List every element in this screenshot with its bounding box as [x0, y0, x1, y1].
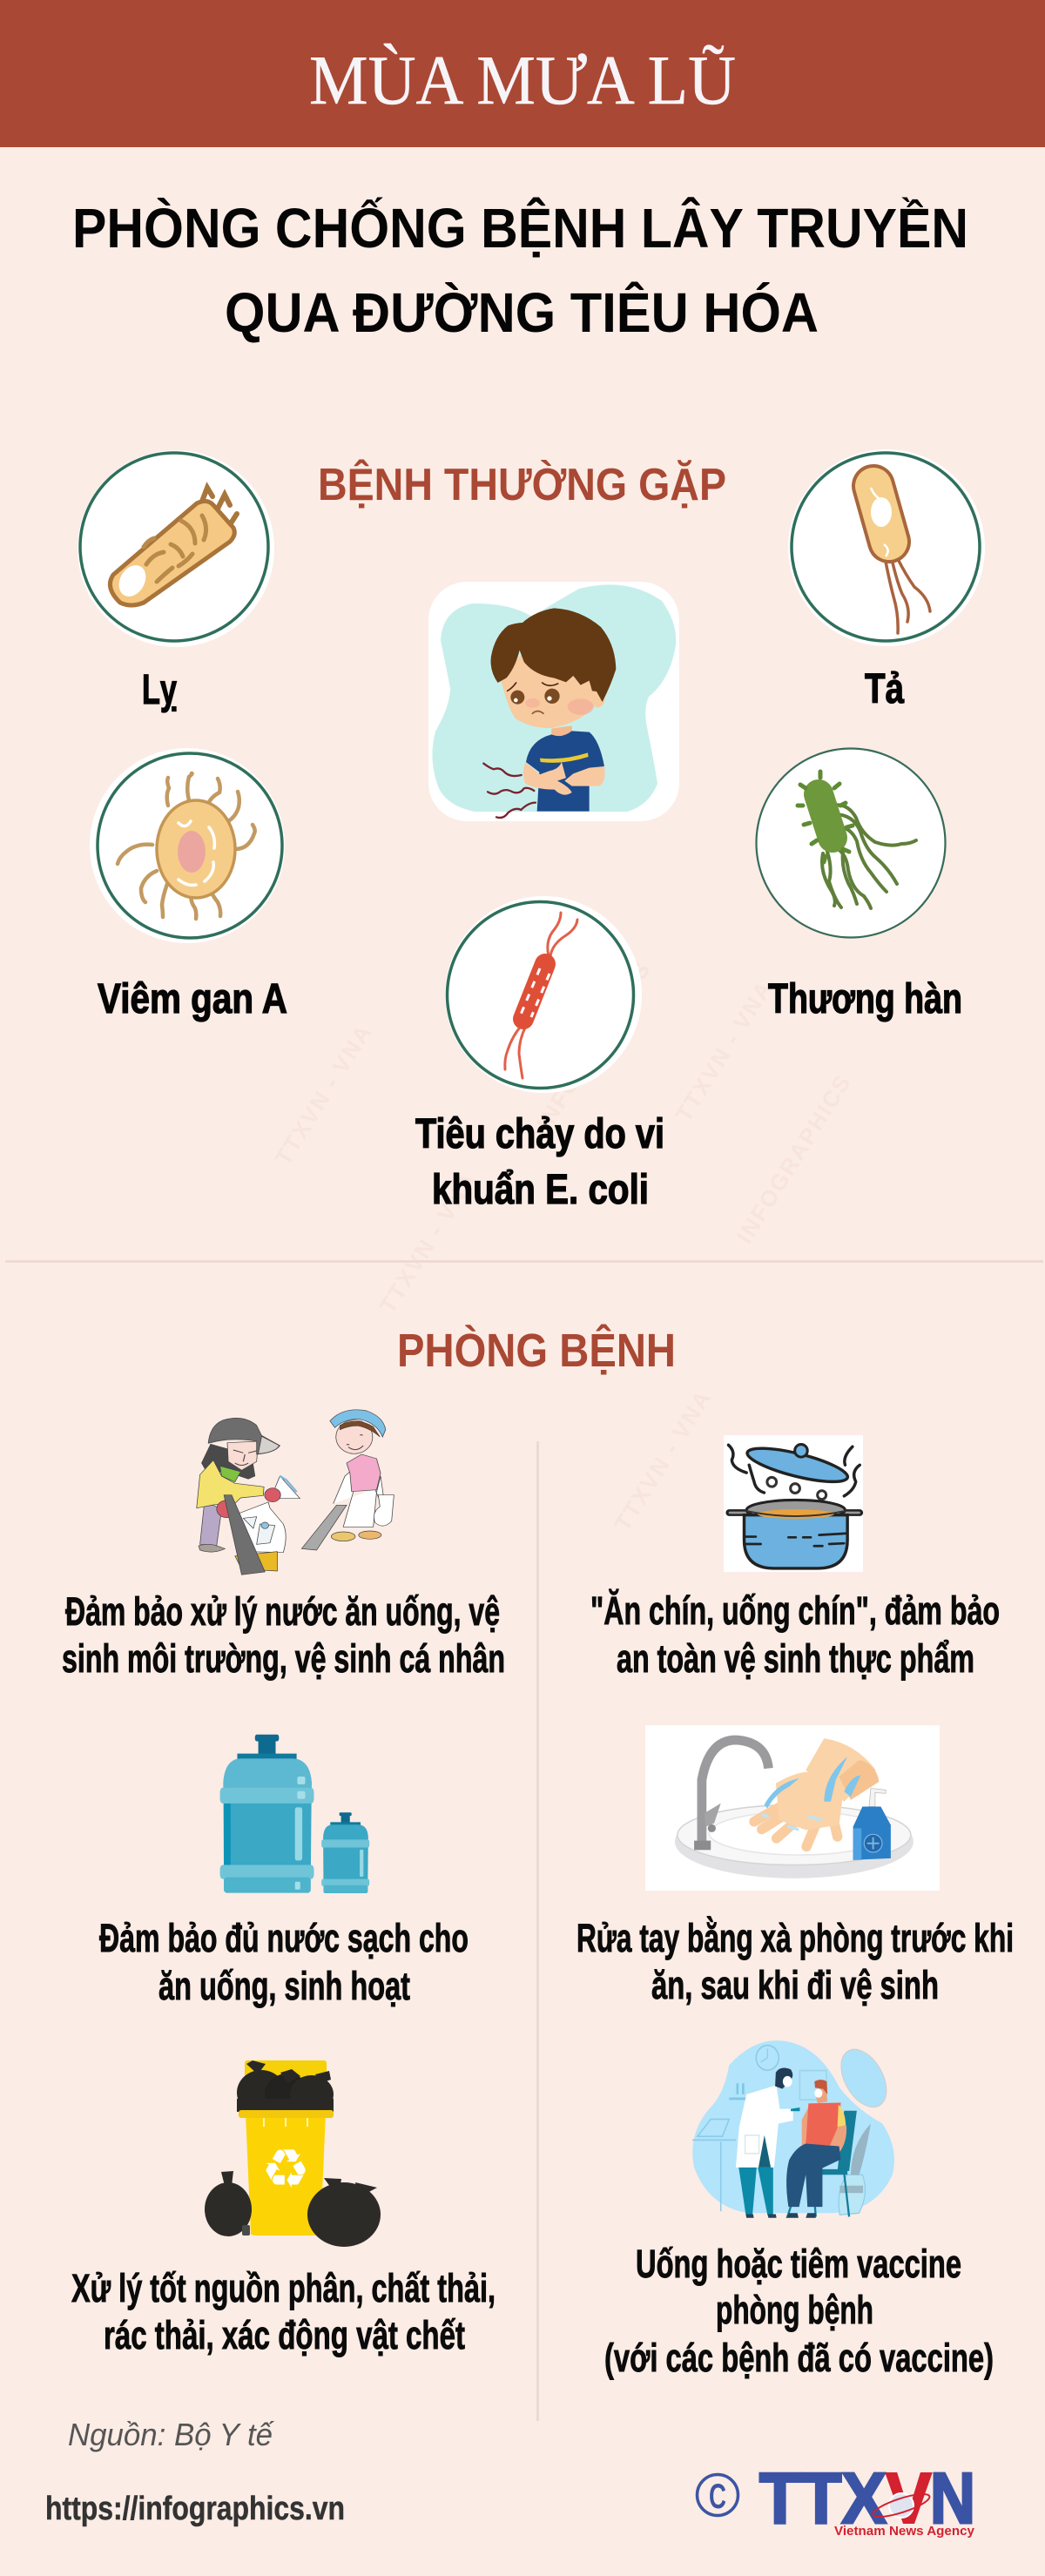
logo: TTXVN Vietnam News Agency: Vietnam News Agency — [834, 2524, 975, 2539]
text: hand washing: ăn, sau khi đi vệ sinh — [651, 1963, 939, 2007]
text: vaccination: phòng bệnh — [716, 2288, 873, 2332]
panel: vaccination — [604, 2040, 994, 2380]
icon: hands washing at sink with soap — [645, 1725, 940, 1891]
text: cooked food — [590, 1588, 1000, 1681]
infographic canvas: TTXVN - VNA — [374, 1167, 482, 1318]
infographic canvas: TTXVN - VNA — [270, 1019, 377, 1170]
disease: E. coli bacterium icon — [445, 896, 642, 1093]
main title: QUA ĐƯỜNG TIÊU HÓA — [225, 280, 819, 344]
text: waste handling — [71, 2266, 496, 2357]
text: waste handling: Xử lý tốt nguồn phân, chất thải, — [71, 2266, 496, 2310]
panel: clean water — [99, 1735, 469, 2008]
disease: Tả bacterium icon — [788, 449, 985, 646]
disease: Viêm gan A virus icon — [90, 748, 285, 943]
copyright mark: C — [709, 2478, 726, 2516]
icon: water bottles — [220, 1735, 369, 1893]
icon: boiling pot — [724, 1435, 863, 1572]
text: hand washing — [576, 1916, 1014, 2007]
disease label: Viêm gan A: Viêm gan A — [98, 976, 287, 1022]
panel: waste handling — [71, 2060, 496, 2357]
disease label: Lỵ: Lỵ — [142, 667, 177, 713]
main title: PHÒNG CHỐNG BỆNH LÂY TRUYỀN — [72, 196, 968, 260]
disease label: Tiêu chảy do vi khuẩn E. coli: khuẩn E. coli — [432, 1167, 649, 1213]
disease: Lỵ bacterium icon — [78, 450, 274, 647]
central illustration: sick boy holding stomach — [428, 582, 679, 821]
icon: doctor vaccinating a patient — [692, 2040, 895, 2218]
logo: TTXVN Vietnam News Agency: N — [930, 2458, 975, 2539]
text: vaccination — [604, 2242, 994, 2380]
text: water and hygiene — [62, 1589, 505, 1681]
disease: Thương hàn bacterium icon — [756, 749, 946, 937]
section heading: common diseases: BỆNH THƯỜNG GẶP — [318, 459, 726, 510]
text: clean water — [99, 1916, 469, 2008]
text: clean water: ăn uống, sinh hoạt — [158, 1964, 410, 2008]
main title — [72, 196, 968, 344]
infographic canvas: TTXVN - VNA — [610, 1385, 717, 1535]
text: water and hygiene: sinh môi trường, vệ sinh cá nhân — [62, 1636, 505, 1681]
website url: https://infographics.vn — [45, 2491, 345, 2527]
source note: Nguồn: Bộ Y tế — [68, 2417, 275, 2452]
icon: people collecting rubbish — [197, 1410, 394, 1575]
infographic canvas: INFOGRAPHICS — [531, 956, 656, 1135]
disease label: Thương hàn: Thương hàn — [768, 976, 962, 1022]
header title: MÙA MƯA LŨ — [309, 43, 736, 119]
text: waste handling: rác thải, xác động vật chết — [104, 2313, 465, 2357]
icon: yellow recycling bin with black bags — [205, 2060, 381, 2247]
logo: TTXVN Vietnam News Agency: TTX — [759, 2458, 887, 2539]
logo: TTXVN Vietnam News Agency: V — [886, 2458, 932, 2539]
disease label: Tiêu chảy do vi khuẩn E. coli — [415, 1111, 664, 1213]
header band — [0, 0, 1045, 147]
head — [501, 653, 603, 728]
logo: TTXVN Vietnam News Agency — [697, 2458, 975, 2539]
wavy pain lines — [483, 764, 536, 818]
text: water and hygiene: Đảm bảo xử lý nước ăn uống, vệ — [65, 1589, 500, 1634]
body — [551, 725, 572, 738]
panel: hand washing — [576, 1725, 1014, 2007]
recycling symbol: ♻ — [261, 2137, 310, 2201]
infographic canvas: TTXVN - VNA — [671, 975, 778, 1126]
panel: sanitation — [62, 1410, 505, 1681]
copyright mark — [697, 2475, 738, 2516]
disease label: Tiêu chảy do vi khuẩn E. coli: Tiêu chảy do vi — [415, 1111, 664, 1157]
text: clean water: Đảm bảo đủ nước sạch cho — [99, 1916, 469, 1960]
section heading: prevention: PHÒNG BỆNH — [397, 1324, 676, 1377]
disease label: Tả: Tả — [865, 666, 904, 712]
infographic canvas: INFOGRAPHICS — [732, 1069, 856, 1248]
panel: cooked food — [590, 1435, 1000, 1681]
